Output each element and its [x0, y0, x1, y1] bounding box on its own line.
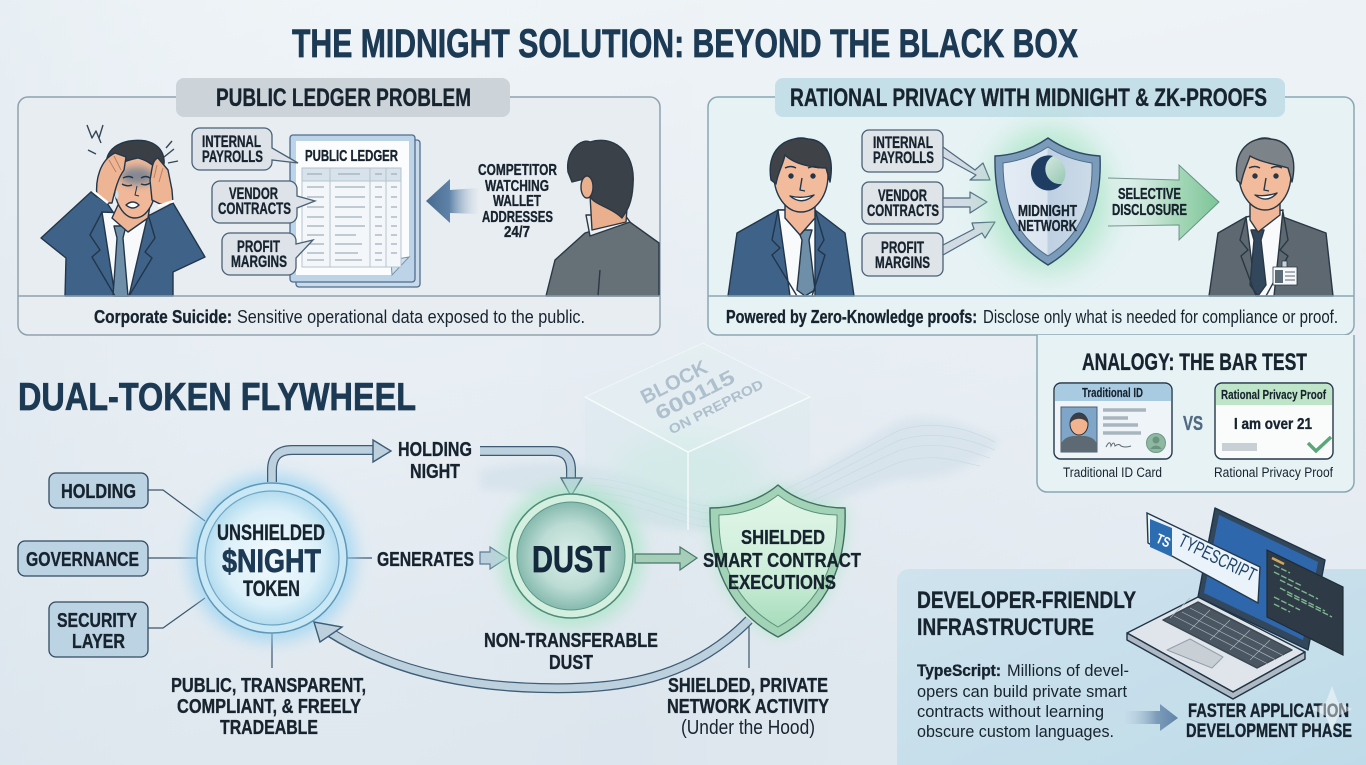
shielded execution shield: EXECUTIONS — [728, 571, 836, 594]
arrow: selective disclosure: DISCLOSURE — [1112, 202, 1187, 219]
label: vendor contracts: VENDOR — [878, 187, 927, 205]
callout: vendor contracts — [212, 181, 315, 223]
callout: vendor contracts: CONTRACTS — [218, 200, 291, 218]
night token circle: UNSHIELDED — [217, 520, 325, 545]
card caption: rational: Rational Privacy Proof — [1214, 465, 1333, 480]
caption: non-transferable dust: NON-TRANSFERABLE — [484, 630, 658, 652]
arrow: dust to shield — [635, 547, 697, 570]
label: governance — [18, 541, 148, 576]
wave mesh decoration — [480, 417, 1000, 530]
arrow: selective disclosure: SELECTIVE — [1118, 186, 1181, 203]
label: security layer — [49, 602, 148, 657]
competitor caption: 24/7 — [504, 224, 530, 241]
callout: profit margins — [222, 233, 313, 275]
caption: public transparent — [171, 675, 366, 739]
arrow: holding night to dust — [480, 451, 582, 496]
card caption: traditional: Traditional ID Card — [1063, 465, 1162, 480]
label: governance: GOVERNANCE — [26, 549, 139, 571]
label: holding: HOLDING — [61, 481, 136, 503]
code window — [1267, 550, 1343, 655]
label: vendor contracts — [862, 182, 943, 224]
dust circle — [499, 484, 643, 628]
laptop illustration — [1127, 508, 1325, 699]
body text: opers can build private smart — [917, 682, 1127, 701]
caption: public transparent: PUBLIC, TRANSPARENT, — [171, 675, 366, 697]
callout: profit margins: MARGINS — [231, 253, 287, 271]
rational privacy proof card: Rational Privacy Proof — [1221, 388, 1327, 402]
rational privacy proof card: I am over 21 — [1234, 416, 1312, 433]
heading pill: rational privacy — [775, 78, 1285, 117]
shielded execution shield — [703, 485, 861, 637]
heading: developer-friendly: INFRASTRUCTURE — [917, 614, 1094, 641]
label: vendor contracts: CONTRACTS — [867, 202, 939, 220]
caption: shielded private — [667, 675, 830, 739]
arrow: selective disclosure — [1108, 165, 1219, 240]
label: holding night — [398, 439, 472, 483]
ledger document: PUBLIC LEDGER — [305, 148, 398, 165]
heading pill: public ledger problem — [176, 78, 510, 117]
body text — [917, 661, 1129, 741]
competitor caption: WALLET — [493, 193, 541, 210]
label: generates: GENERATES — [377, 549, 474, 571]
smiling businessman figure — [728, 138, 854, 296]
label: holding — [49, 473, 148, 508]
caption: public transparent: TRADEABLE — [220, 717, 318, 739]
hands on head — [91, 153, 174, 206]
footer text: corporate suicide — [94, 306, 585, 327]
watermark sparkle — [1312, 686, 1352, 732]
callout: profit margins: PROFIT — [237, 238, 280, 256]
callout: internal payrolls: INTERNAL — [202, 133, 261, 151]
cube text — [637, 356, 766, 437]
night token circle: TOKEN — [243, 576, 300, 601]
arrow: generates — [480, 547, 507, 569]
rational privacy proof card — [1215, 383, 1333, 459]
typescript banner: TYPESCRIPT — [1175, 531, 1260, 586]
traditional id card: Traditional ID — [1082, 386, 1143, 400]
caption: non-transferable dust — [484, 630, 658, 674]
label: security layer: LAYER — [72, 631, 125, 653]
midnight network shield — [986, 128, 1110, 272]
caption: faster application — [1186, 701, 1352, 742]
competitor figure from behind — [546, 140, 659, 296]
caption: shielded private: NETWORK ACTIVITY — [667, 696, 830, 718]
arrow: night to holding — [272, 440, 391, 482]
heading: developer-friendly — [917, 587, 1136, 641]
body text: Millions of devel- — [1007, 661, 1129, 680]
footer text: corporate suicide: Sensitive operational data exposed to the public. — [237, 306, 585, 327]
id badge — [1273, 261, 1297, 285]
callout: vendor contracts: VENDOR — [229, 185, 278, 203]
dust circle: DUST — [532, 539, 611, 580]
caption: public transparent: COMPLIANT, & FREELY — [177, 696, 362, 718]
vs label: VS — [1183, 413, 1203, 435]
label: profit margins — [862, 233, 943, 276]
panel: rational privacy — [708, 78, 1354, 335]
competitor caption: ADDRESSES — [482, 209, 553, 226]
label: holding night: NIGHT — [410, 461, 460, 483]
body text: TypeScript: — [917, 661, 1001, 680]
footer text: zero-knowledge: Powered by Zero-Knowledge proofs: — [726, 306, 977, 327]
flywheel diagram — [18, 439, 861, 739]
arrows into shield — [943, 147, 995, 255]
verifier figure with badge — [1209, 138, 1333, 296]
panel: public ledger problem — [18, 78, 660, 335]
night token circle: $NIGHT — [222, 543, 321, 579]
connectors — [148, 490, 749, 668]
competitor caption: COMPETITOR — [478, 162, 557, 179]
ledger document — [290, 135, 420, 287]
shielded execution shield: SMART CONTRACT — [703, 549, 861, 572]
traditional id card — [1054, 383, 1172, 459]
body text: contracts without learning — [917, 702, 1104, 721]
cube text: ON PREPROD — [666, 377, 766, 437]
block cube watermark — [585, 343, 810, 530]
cube text: BLOCK — [637, 356, 712, 409]
typescript banner: TS — [1154, 530, 1173, 550]
label: holding night: HOLDING — [398, 439, 472, 461]
midnight network shield: MIDNIGHT — [1018, 203, 1077, 220]
cube text: 600115 — [652, 366, 739, 425]
label: profit margins: MARGINS — [875, 254, 930, 272]
moon icon — [1030, 155, 1066, 190]
label: profit margins: PROFIT — [881, 239, 924, 257]
callout: internal payrolls: PAYROLLS — [202, 148, 263, 166]
night token circle — [188, 474, 356, 642]
stressed executive figure — [41, 125, 205, 296]
heading: dual-token flywheel: DUAL-TOKEN FLYWHEEL — [18, 376, 416, 419]
footer text: corporate suicide: Corporate Suicide: — [94, 306, 232, 327]
callout: internal payrolls — [192, 128, 298, 170]
caption: non-transferable dust: DUST — [549, 652, 593, 674]
competitor caption: WATCHING — [485, 178, 549, 195]
arrow: competitor watching — [426, 179, 478, 223]
body text: obscure custom languages. — [917, 722, 1114, 741]
caption: shielded private: SHIELDED, PRIVATE — [668, 675, 828, 697]
label: security layer: SECURITY — [57, 610, 138, 632]
heading: developer-friendly: DEVELOPER-FRIENDLY — [917, 587, 1136, 614]
return arrow: shield to night — [314, 620, 749, 688]
panel: developer-friendly infrastructure — [897, 508, 1366, 765]
midnight network shield: NETWORK — [1018, 218, 1078, 235]
title: THE MIDNIGHT SOLUTION: BEYOND THE BLACK BOX — [292, 22, 1078, 66]
label: internal payrolls: INTERNAL — [873, 134, 933, 152]
competitor caption — [478, 162, 557, 241]
arrow: faster development — [1125, 704, 1178, 731]
caption: shielded private: (Under the Hood) — [681, 717, 815, 739]
footer text: zero-knowledge — [726, 306, 1338, 327]
heading pill: public ledger problem: PUBLIC LEDGER PROBLEM — [216, 84, 471, 112]
label: internal payrolls: PAYROLLS — [873, 149, 934, 167]
check mark — [1308, 437, 1331, 451]
shielded execution shield: SHIELDED — [741, 526, 825, 549]
typescript banner — [1147, 513, 1260, 603]
label: internal payrolls — [862, 130, 943, 172]
panel: analogy the bar test — [1037, 335, 1354, 492]
